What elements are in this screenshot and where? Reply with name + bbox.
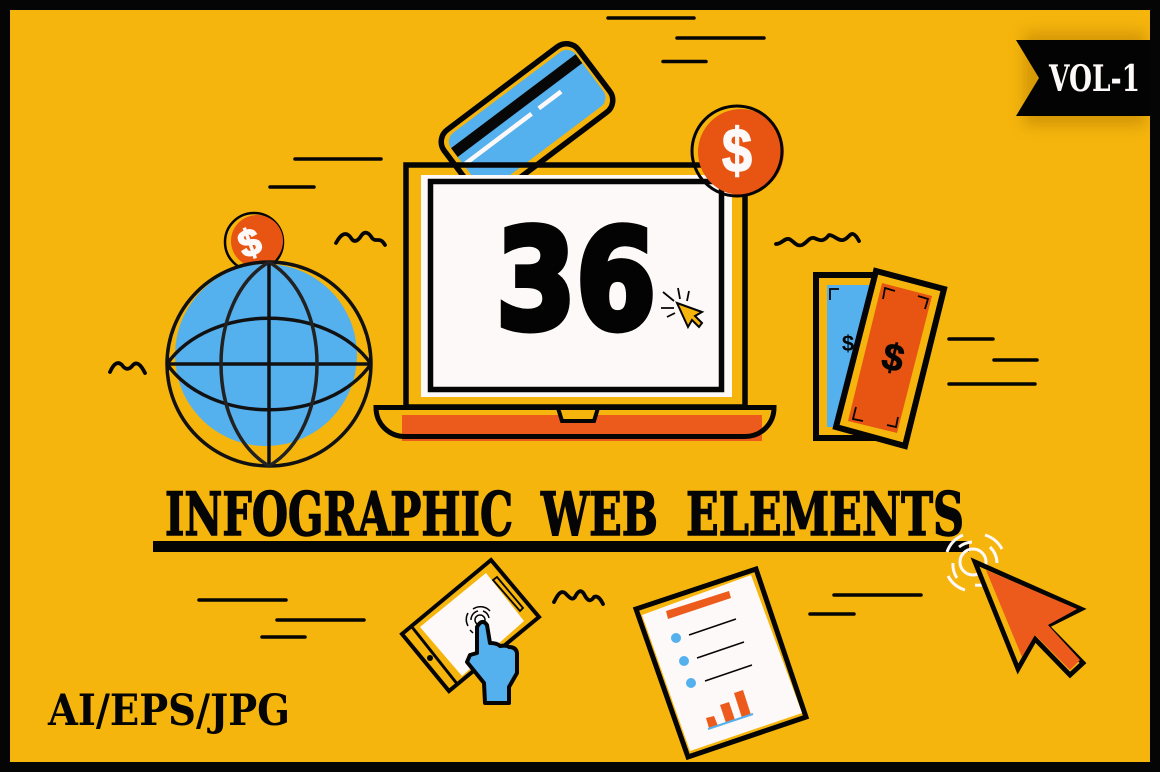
screen <box>430 182 722 390</box>
decorative speed lines top <box>608 18 764 62</box>
document with bullets and chart <box>636 569 806 757</box>
front bill corner marks <box>853 288 928 427</box>
large arrow cursor <box>975 562 1083 675</box>
magnetic stripe <box>451 54 582 157</box>
front bill orange face <box>848 283 932 433</box>
tablet divider and home button <box>412 627 458 685</box>
laptop base orange fill <box>402 415 762 441</box>
bullet list <box>671 619 752 688</box>
ribbon shadow <box>1024 32 1146 126</box>
title: WEB <box>540 480 658 550</box>
credit card <box>435 38 619 204</box>
laptop base outline <box>376 408 774 436</box>
number 36: 36 <box>496 200 656 361</box>
squiggle right of laptop <box>776 234 859 245</box>
back bill dollar sign: $ <box>842 331 854 356</box>
decorative speed lines bottom left <box>199 600 364 637</box>
click rays <box>661 288 689 317</box>
globe outline and grid <box>167 262 371 466</box>
format label: AI/EPS/JPG <box>47 686 290 736</box>
mini bar chart <box>706 690 753 729</box>
click ripples <box>947 535 1002 590</box>
tablet screen <box>420 573 524 676</box>
squiggle left of globe <box>110 363 145 373</box>
tablet speaker slot <box>493 577 523 611</box>
document heading bar <box>666 591 731 619</box>
trackpad notch <box>558 408 598 421</box>
decorative speed lines right <box>949 339 1037 384</box>
screen bezel <box>421 175 732 397</box>
cursor orange fill <box>986 570 1080 670</box>
squiggle near globe top <box>336 233 385 245</box>
decorative speed lines left <box>270 159 381 187</box>
globe <box>167 262 371 466</box>
title <box>165 480 964 550</box>
globe ocean fill <box>175 264 357 446</box>
front bill <box>836 271 944 446</box>
title: ELEMENTS <box>686 480 964 550</box>
document page <box>642 575 802 751</box>
small dollar coin on globe <box>225 213 283 271</box>
small dollar sign: $ <box>233 220 267 267</box>
laptop body backing <box>406 165 745 405</box>
title: INFOGRAPHIC <box>165 480 513 550</box>
squiggle between tablet and document <box>554 591 603 604</box>
pointing hand <box>467 622 517 703</box>
laptop <box>376 165 774 441</box>
back bill <box>816 275 886 438</box>
money bills <box>816 271 944 446</box>
touch ripples <box>466 607 490 633</box>
laptop lid outline <box>406 165 745 407</box>
back bill blue face <box>827 285 882 427</box>
ribbon: VOL-1 <box>1016 40 1150 116</box>
home button <box>427 655 433 661</box>
back bill corner mark <box>830 289 839 300</box>
card number bars <box>465 92 561 164</box>
tablet with tapping hand <box>402 560 539 703</box>
dollar sign: $ <box>722 117 752 186</box>
front bill dollar sign: $ <box>878 335 908 381</box>
small cursor on screen <box>661 288 702 327</box>
large dollar coin <box>692 106 784 196</box>
title underline <box>153 541 969 552</box>
card face <box>444 46 610 194</box>
decorative speed lines bottom right <box>810 595 921 614</box>
